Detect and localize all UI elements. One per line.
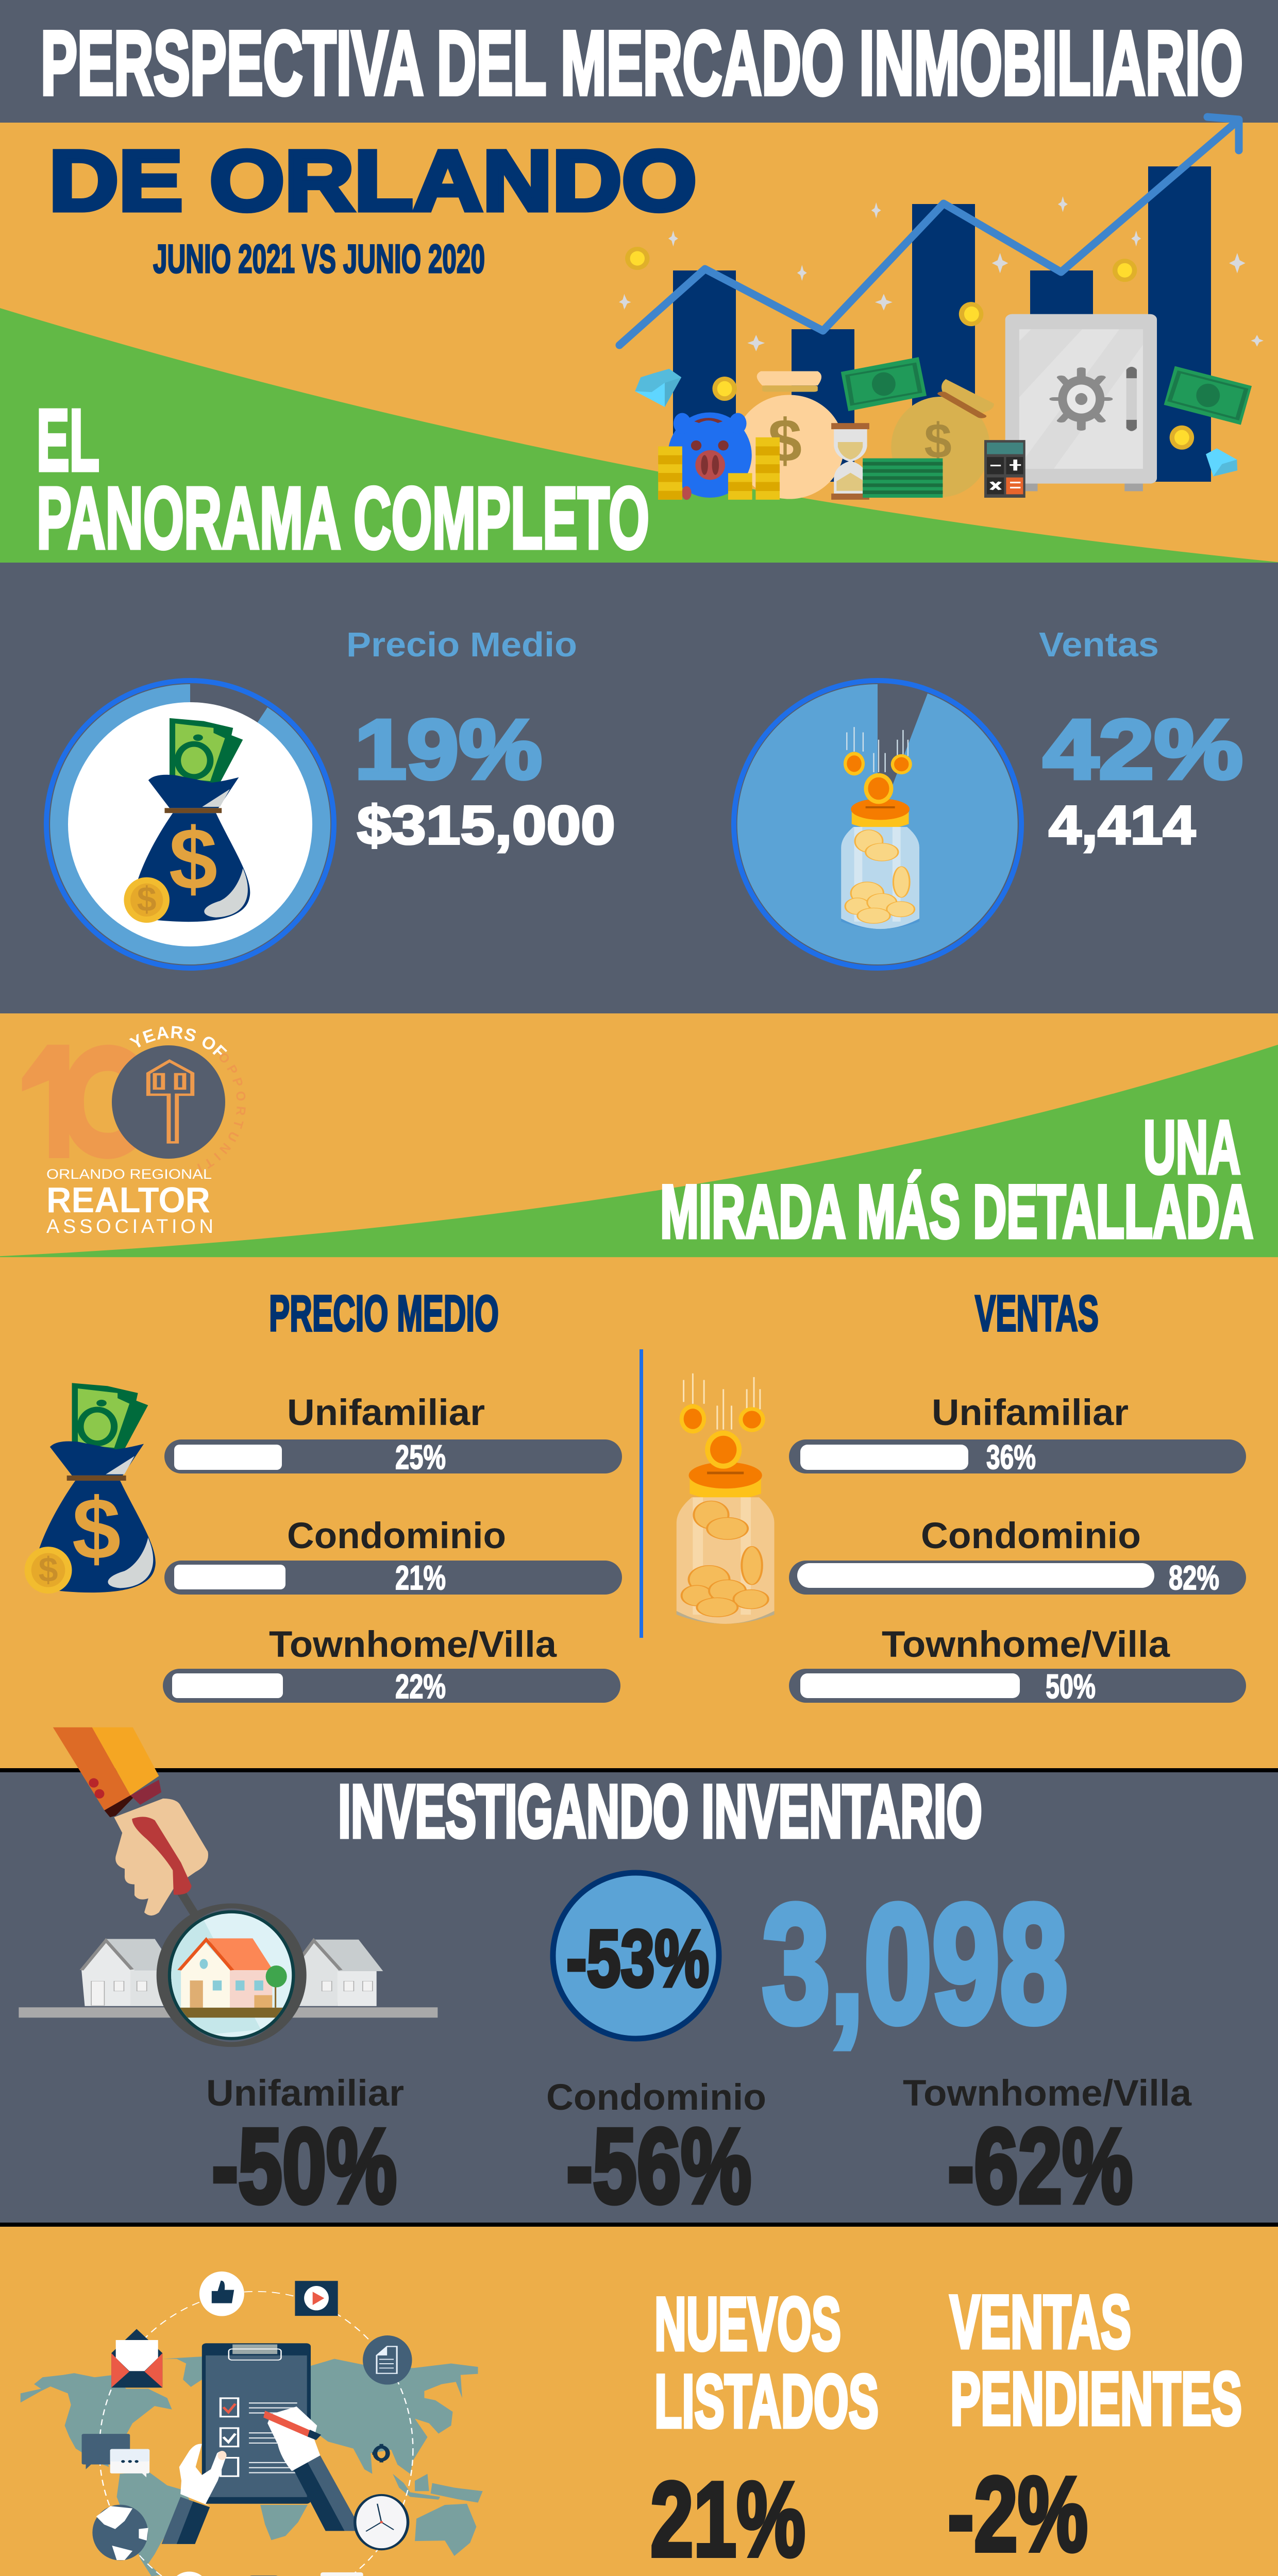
icon: thumbs up <box>199 2272 244 2316</box>
logo wordmark: ORLANDO REGIONAL <box>46 1166 212 1182</box>
logo curved text: OPPORTUNITIES <box>197 1053 246 1173</box>
bar group: ventas townhome <box>789 1624 1246 1705</box>
icon: envelope <box>111 2329 162 2387</box>
logo key icon <box>148 1061 192 1142</box>
heading: el panorama completo <box>37 392 649 567</box>
icon: coin jar <box>841 727 919 929</box>
icon: phone <box>248 2575 279 2576</box>
stat: precio medio change: 19% <box>355 702 542 796</box>
bar group: ventas unifamiliar: Unifamiliar <box>932 1393 1129 1433</box>
bar group: precio medio townhome <box>163 1624 620 1705</box>
bar group: ventas townhome: 50% <box>1046 1667 1096 1705</box>
green wedge: overview <box>0 308 1278 563</box>
stat label: precio medio: Precio Medio <box>346 625 577 664</box>
bar group: precio medio unifamiliar <box>164 1393 622 1476</box>
icon: money bag: $ <box>137 880 157 919</box>
peach money bag: $ <box>768 407 802 475</box>
bar group: ventas condominio: 82% <box>1169 1558 1219 1597</box>
column heading: precio medio: PRECIO MEDIO <box>269 1285 499 1342</box>
bar group: precio medio unifamiliar: Unifamiliar <box>287 1393 485 1433</box>
stat bubble: -53% <box>553 1873 719 2039</box>
date line: JUNIO 2021 VS JUNIO 2020 <box>153 236 485 281</box>
tan money bag: $ <box>924 414 952 469</box>
inventory: townhome villa: Townhome/Villa <box>903 2073 1192 2114</box>
upper sparkles and coins <box>619 196 1246 310</box>
icon: chat bubbles <box>82 2434 149 2477</box>
panel: inventory background <box>0 1772 1278 2223</box>
bar group: ventas unifamiliar <box>789 1393 1246 1476</box>
logo curved text: YEARS OF <box>129 1026 227 1055</box>
sparkles <box>619 294 1264 351</box>
icon: video play <box>295 2281 338 2316</box>
bar group: precio medio condominio: 21% <box>395 1558 446 1597</box>
green banknote left <box>841 357 927 411</box>
tan money bag <box>891 379 994 497</box>
inventory: townhome villa: -62% <box>948 2107 1133 2225</box>
illustration: hand with magnifier over houses <box>19 1727 438 2044</box>
heading: el panorama completo: PANORAMA COMPLETO <box>37 469 649 567</box>
inventory: townhome villa <box>903 2073 1192 2225</box>
logo numeral 10 <box>22 1045 155 1159</box>
icon: document <box>363 2335 412 2385</box>
logo wordmark: REALTOR <box>46 1180 210 1220</box>
stat: precio medio value: $315,000 <box>357 795 615 856</box>
icon: clock <box>355 2495 408 2549</box>
icon: globe <box>92 2505 148 2561</box>
stat: ventas pendientes: VENTAS <box>950 2280 1131 2364</box>
subtitle: de Orlando: DE ORLANDO <box>49 133 697 229</box>
heading: una mirada mas detallada <box>660 1105 1253 1253</box>
chart: rising bars with arrow line <box>619 117 1239 482</box>
bar group: precio medio townhome: 22% <box>395 1667 446 1705</box>
bar group: ventas unifamiliar: 36% <box>986 1438 1036 1476</box>
section: key stats background <box>0 563 1278 1013</box>
icon: money bag small <box>25 1383 156 1594</box>
stat bubble: -53%: -53% <box>566 1914 709 2004</box>
column heading: ventas: VENTAS <box>975 1285 1099 1342</box>
inventory: condominio: -56% <box>566 2107 751 2225</box>
panel: overview background <box>0 123 1278 563</box>
stat: nuevos listados: LISTADOS <box>654 2359 879 2443</box>
safe <box>1005 314 1157 491</box>
icon: coin jar small <box>677 1374 775 1624</box>
piggy bank <box>668 412 752 500</box>
hands and sleeves <box>161 2406 357 2544</box>
stat: ventas pendientes <box>948 2280 1242 2573</box>
inventory: condominio: Condominio <box>546 2077 766 2118</box>
icon: money bag <box>124 718 250 923</box>
panel: detailed look background <box>0 1013 1278 1768</box>
illustration: money and safe <box>619 294 1264 500</box>
peach money bag <box>735 371 844 499</box>
icon: cloud <box>155 2571 212 2576</box>
world map <box>21 2357 483 2576</box>
stat: ventas change: 42% <box>1043 702 1243 796</box>
gold coin stacks <box>658 437 780 500</box>
bar group: ventas townhome: Townhome/Villa <box>882 1624 1170 1665</box>
stat: inventory total: 3,098 <box>762 1870 1068 2058</box>
bar group: precio medio condominio <box>164 1516 622 1597</box>
inventory: unifamiliar: Unifamiliar <box>206 2073 404 2114</box>
pie chart: ventas <box>734 681 1021 968</box>
bar group: precio medio unifamiliar: 25% <box>395 1438 446 1476</box>
hand and sleeve <box>53 1727 208 1916</box>
section: header band <box>0 0 1278 123</box>
dashed orbit <box>99 2292 413 2576</box>
logo wordmark: ASSOCIATION <box>46 1216 213 1238</box>
inventory: condominio <box>546 2077 766 2225</box>
icon: gear <box>372 2444 391 2463</box>
logo: realtor association <box>22 1026 246 1238</box>
logo wordmark <box>46 1166 213 1238</box>
green banknote right <box>1164 366 1252 425</box>
stat: nuevos listados: 21% <box>650 2460 805 2576</box>
road <box>19 2007 438 2018</box>
coins <box>712 302 1194 450</box>
icon: credit card <box>321 2572 363 2576</box>
diamonds <box>635 369 1237 477</box>
bar group: ventas condominio: Condominio <box>921 1516 1141 1556</box>
logo curved text <box>129 1026 246 1173</box>
green wedge: detail <box>0 1045 1278 1257</box>
clipboard <box>202 2343 311 2504</box>
bar group: precio medio townhome: Townhome/Villa <box>269 1624 557 1665</box>
handle and magnifier <box>163 1892 301 2044</box>
hourglass <box>831 423 869 500</box>
stat: nuevos listados: NUEVOS <box>654 2282 841 2366</box>
inventory: unifamiliar: -50% <box>212 2107 397 2225</box>
bar group: ventas condominio <box>789 1516 1246 1597</box>
stat: ventas value: 4,414 <box>1049 795 1196 856</box>
cash stack <box>863 459 943 498</box>
bar group: precio medio condominio: Condominio <box>287 1516 506 1556</box>
icon: money bag small: $ <box>39 1550 58 1589</box>
calculator <box>984 440 1025 498</box>
icon: money bag small: $ <box>72 1480 121 1578</box>
grey houses <box>81 1939 383 2006</box>
panel: listings background <box>0 2227 1278 2576</box>
donut chart: precio medio <box>46 681 334 968</box>
stat: ventas pendientes: -2% <box>948 2455 1088 2573</box>
inventory: unifamiliar <box>206 2073 404 2225</box>
stat label: ventas: Ventas <box>1039 625 1159 664</box>
stat: nuevos listados <box>650 2282 879 2576</box>
icon: money bag: $ <box>169 810 217 908</box>
heading: el panorama completo: EL <box>37 392 99 489</box>
illustration: world map with checklist <box>21 2272 483 2576</box>
